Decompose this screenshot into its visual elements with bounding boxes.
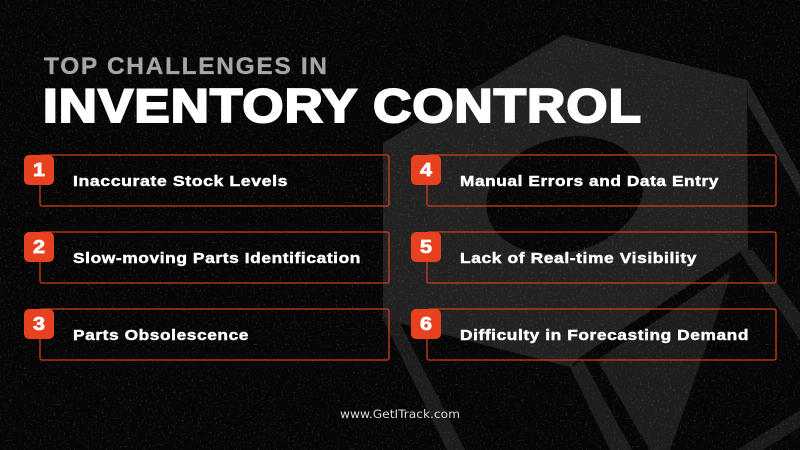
item 2: Slow-moving Parts Identification <box>73 250 361 267</box>
heading: inventory control: INVENTORY CONTROL <box>43 79 642 132</box>
item 2: 2 <box>33 237 45 257</box>
item 3: 3 <box>33 314 45 334</box>
item 1: 1 <box>33 160 45 180</box>
heading: top challenges in: TOP CHALLENGES IN <box>44 53 327 80</box>
title <box>43 53 642 132</box>
item 6 <box>411 309 776 360</box>
footer website: www.GetITrack.com <box>340 407 460 421</box>
item 6: 6 <box>420 314 432 334</box>
item 6: Difficulty in Forecasting Demand <box>460 327 749 344</box>
item 3: Parts Obsolescence <box>73 327 249 344</box>
item 5 <box>411 232 776 283</box>
item 4 <box>411 155 776 206</box>
item 1: Inaccurate Stock Levels <box>73 173 288 190</box>
item 4: Manual Errors and Data Entry <box>460 173 719 190</box>
item 2 <box>24 232 389 283</box>
item 5: 5 <box>420 237 432 257</box>
item 1 <box>24 155 389 206</box>
item 3 <box>24 309 389 360</box>
item 4: 4 <box>420 160 432 180</box>
item 5: Lack of Real-time Visibility <box>460 250 697 267</box>
background logo watermark <box>382 35 800 450</box>
